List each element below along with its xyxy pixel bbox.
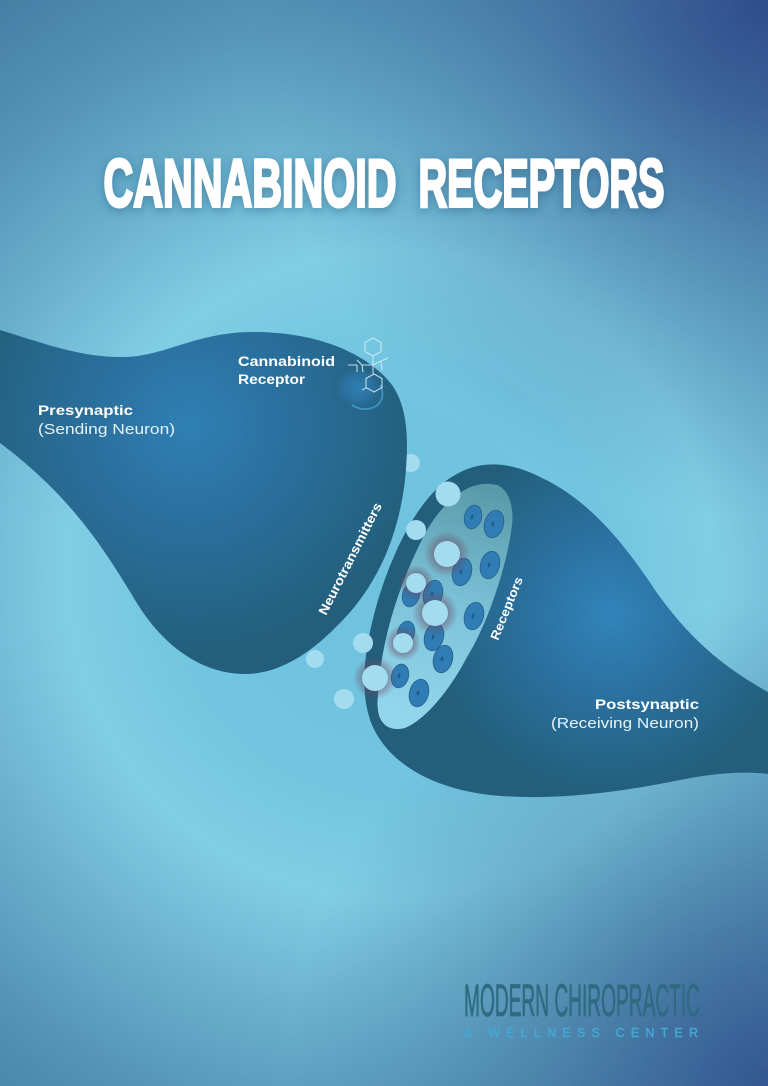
neurotransmitters behind presynaptic neuron (306, 454, 420, 668)
binding glow halos (353, 531, 470, 700)
receptors (389, 503, 507, 709)
label: presynaptic (38, 402, 175, 438)
panel: presynaptic neuron (0, 330, 407, 674)
label: presynaptic: (Sending Neuron) (38, 421, 175, 438)
title: CANNABINOID (104, 146, 396, 222)
label: cannabinoid receptor: Receptor (238, 372, 306, 387)
label: postsynaptic: (Receiving Neuron) (551, 715, 699, 732)
label: presynaptic: Presynaptic (38, 402, 133, 418)
neurotransmitter molecules (334, 482, 460, 709)
label: receptors: Receptors (488, 575, 526, 642)
logo: & WELLNESS CENTER (464, 1026, 698, 1040)
logo (464, 975, 700, 1040)
label: cannabinoid receptor: Cannabinoid (238, 354, 335, 369)
label: postsynaptic (551, 696, 699, 732)
label: postsynaptic: Postsynaptic (595, 696, 699, 712)
icon: molecule (348, 338, 388, 392)
label: neurotransmitters: Neurotransmitters (315, 500, 385, 617)
panel: postsynaptic neuron (364, 464, 768, 797)
icon: cannabinoid receptor pocket (331, 364, 385, 412)
receptor disc (377, 484, 512, 729)
label: cannabinoid receptor (238, 354, 335, 387)
